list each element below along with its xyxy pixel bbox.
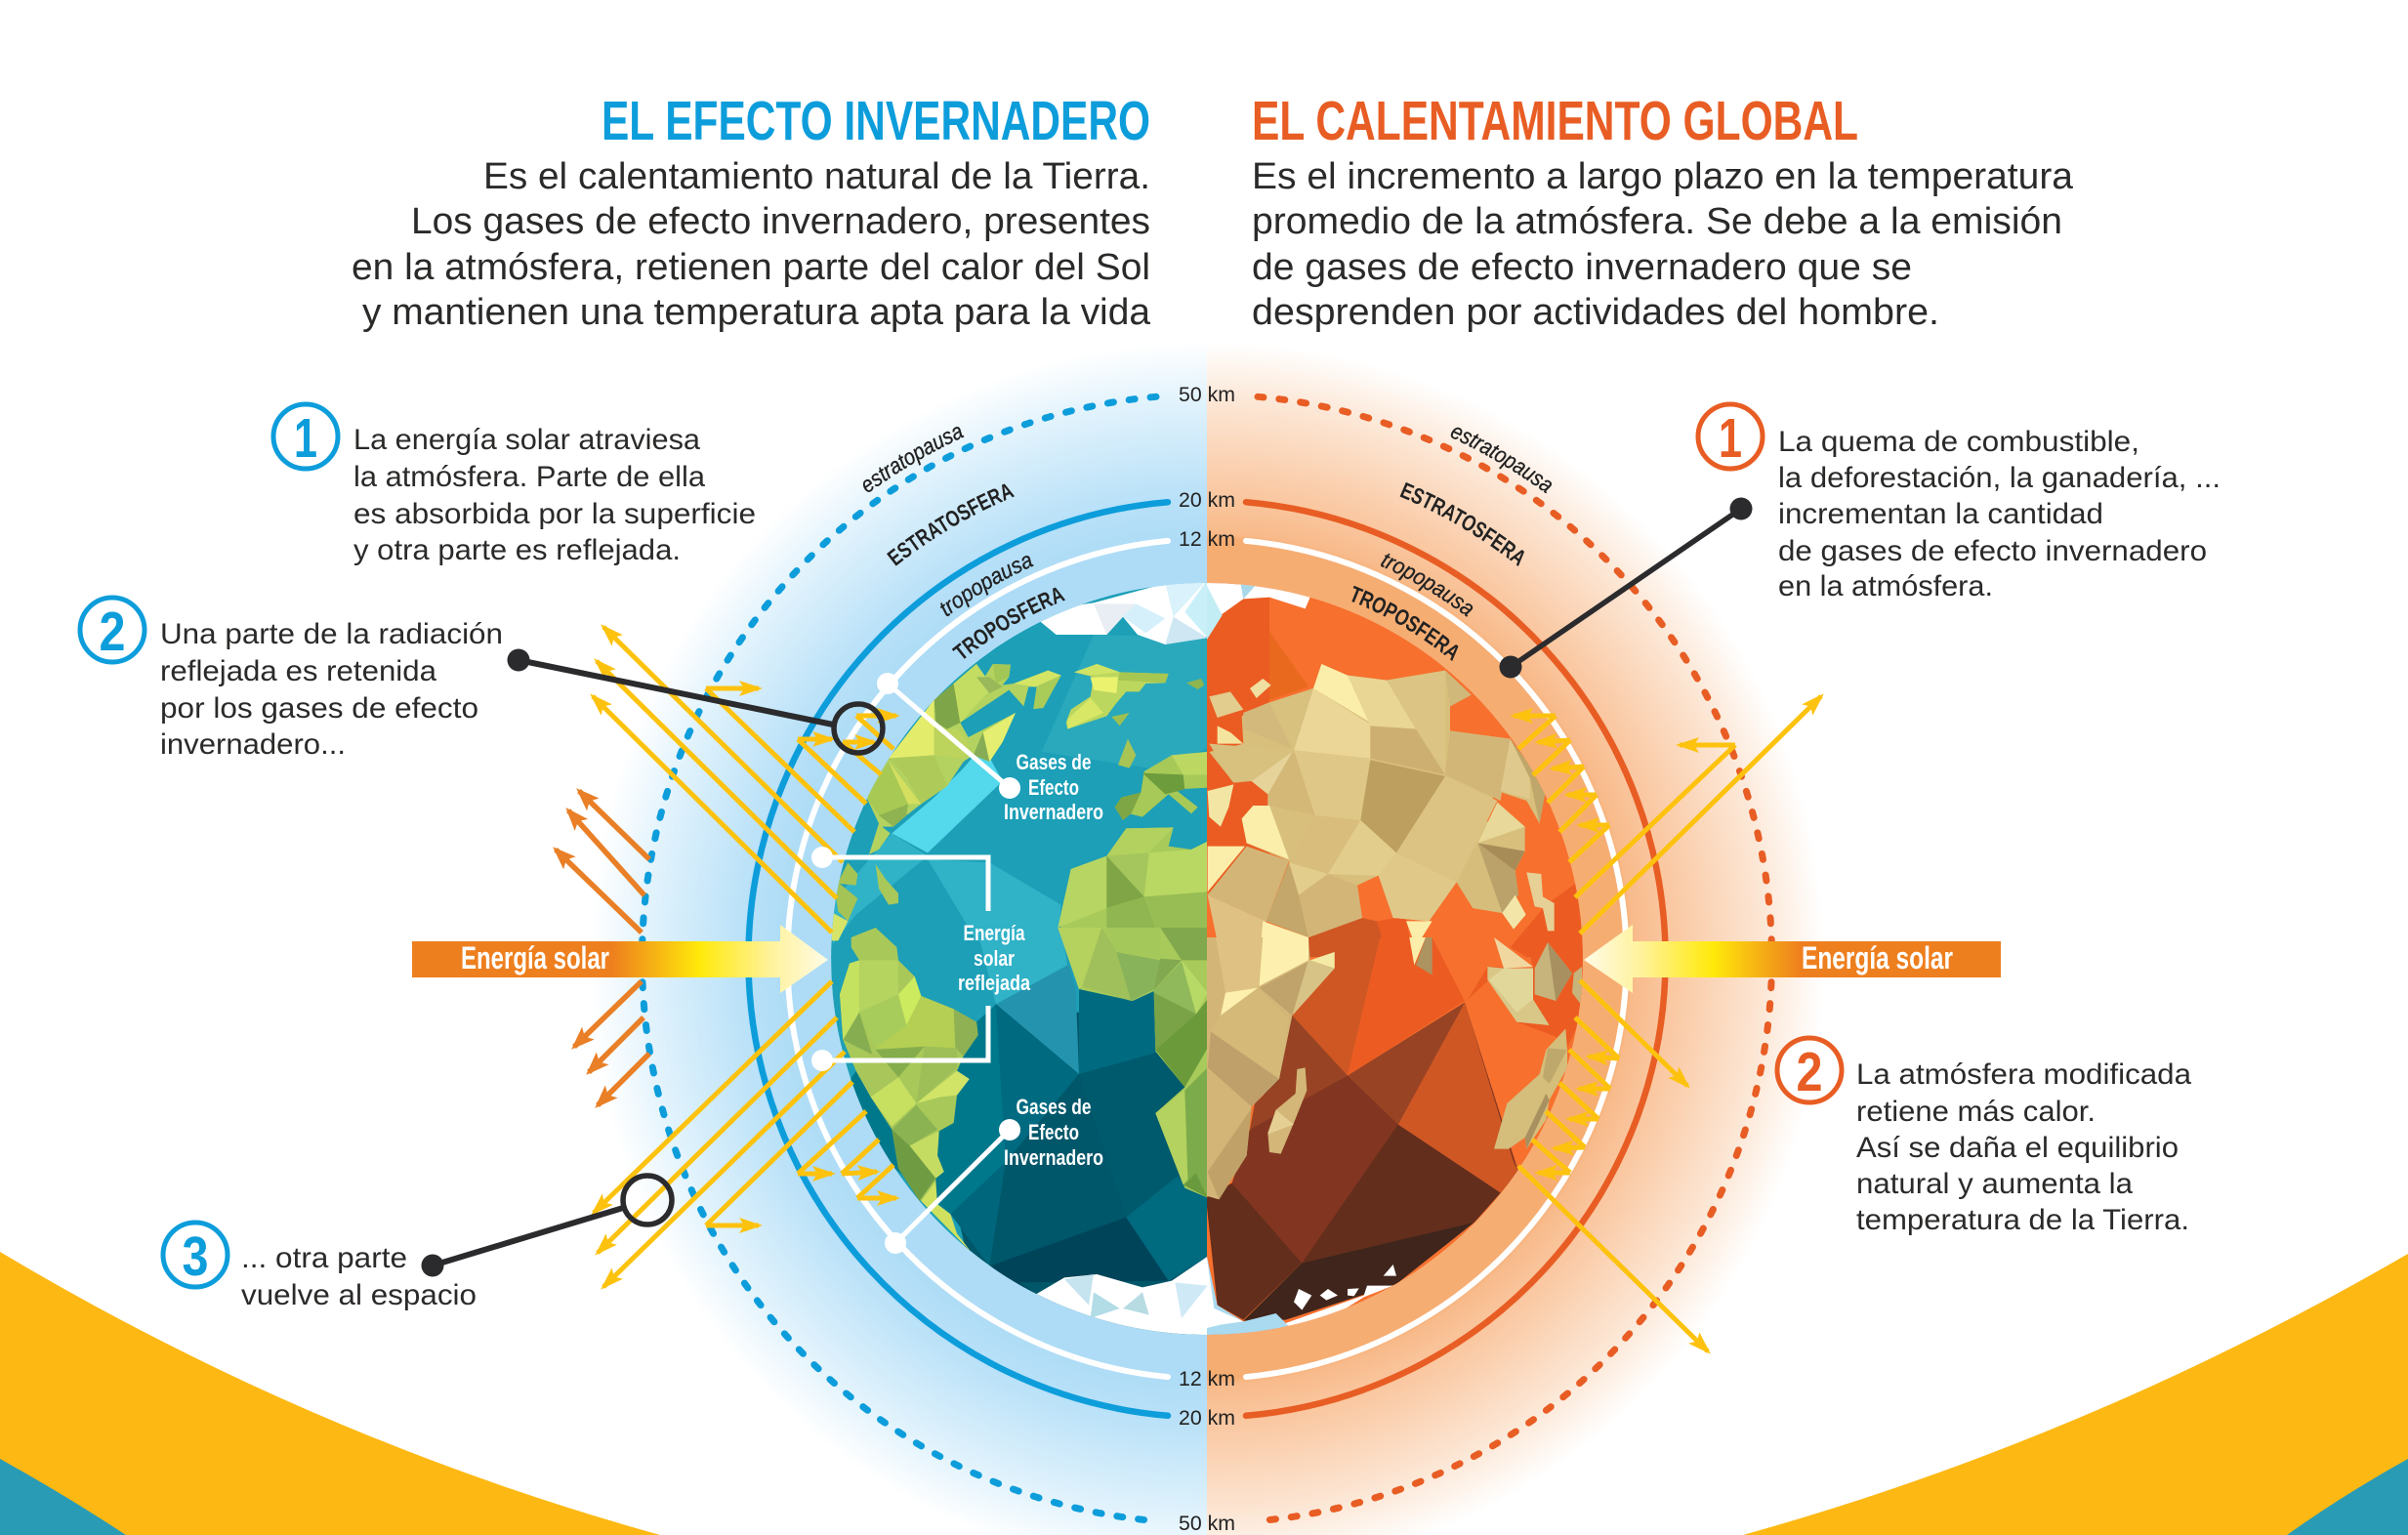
intro text: global warming: desprenden por actividades del hombre. (1252, 292, 1939, 333)
earth label: gases upper: Invernadero (1004, 800, 1103, 824)
arabia and africa east (1201, 937, 1335, 1199)
atmosphere rings: right (1246, 396, 1771, 1521)
earth: left half, natural blue and green (820, 576, 1211, 1350)
leader line: callout 2 left to lens (508, 648, 883, 753)
earth label: gases upper: Efecto (1028, 775, 1079, 800)
curved atmosphere labels: right: estratopausa (1451, 428, 1552, 494)
callout: right 1: incrementan la cantidad (1778, 498, 2103, 530)
intro text: greenhouse effect: Es el calentamiento natural de la Tierra. (483, 156, 1150, 197)
earth label: gases lower: Invernadero (1004, 1145, 1103, 1170)
callout: right 2: natural y aumenta la (1856, 1168, 2133, 1200)
earth label: gases lower (1004, 1095, 1103, 1170)
antarctic ice (1207, 1256, 1288, 1335)
intro text: greenhouse effect: en la atmósfera, retienen parte del calor del Sol (352, 247, 1150, 288)
badge: right 2: 2 (1797, 1041, 1822, 1103)
badge: right 2 (1777, 1038, 1842, 1103)
upper ocean and eurasia (1201, 576, 1583, 957)
intro text: global warming: de gases de efecto invernadero que se (1252, 247, 1912, 288)
lower ocean and southern land (830, 928, 1208, 1350)
callout: left 2 (160, 618, 503, 761)
earth label: reflected energy: Energía (963, 921, 1025, 945)
reflected rays: left side (593, 627, 896, 1287)
callout: left 2: por los gases de efecto (160, 692, 478, 725)
title: global warming: EL CALENTAMIENTO GLOBAL (1252, 90, 1858, 152)
badge: left 2 (80, 598, 145, 663)
earth label: gases lower: Gases de (1016, 1095, 1092, 1119)
intro text: global warming: Es el incremento a largo plazo en la temperatura (1252, 156, 2074, 197)
white connector: reflected energy (811, 847, 988, 1071)
darker seas and islands (1511, 879, 1583, 957)
south america (840, 928, 978, 1252)
leader line: callout 3 left to lens (422, 1176, 672, 1277)
intro text: greenhouse effect (352, 156, 1151, 333)
south-east asia (1494, 937, 1533, 969)
upper ocean and northern land (830, 579, 1208, 944)
callout: left 1: La energía solar atraviesa (353, 424, 700, 456)
curved atmosphere labels: left: ESTRATOSFERA (887, 484, 1015, 566)
central america (876, 864, 898, 905)
callout: right 2: temperatura de la Tierra. (1856, 1204, 2189, 1236)
india tip and madagascar (1409, 937, 1426, 965)
leader line: callout 1 right (1500, 498, 1752, 678)
callout: left 3: vuelve al espacio (241, 1279, 477, 1311)
earth label: reflected energy: solar (974, 946, 1015, 971)
atmosphere glow: orange half (1207, 353, 1812, 1535)
callout: right 2 (1856, 1058, 2191, 1236)
callout: right 1 (1778, 426, 2221, 602)
solar energy arrow: left: Energía solar (461, 940, 609, 975)
bottom decorative band: left (0, 1252, 660, 1535)
curved atmosphere labels: right: ESTRATOSFERA (1400, 482, 1524, 566)
australia (1494, 1028, 1567, 1149)
callout: right 1: en la atmósfera. (1778, 570, 1993, 602)
altitude labels: 12 km (1179, 528, 1235, 551)
atmosphere glow: blue half (606, 358, 1207, 1535)
solar energy arrow: left (412, 925, 828, 993)
greenland and arctic islands (1066, 664, 1169, 729)
eurasia (1209, 664, 1546, 937)
callout: left 2: reflejada es retenida (160, 655, 436, 687)
badge: right 1: 1 (1719, 407, 1742, 470)
curved atmosphere labels: right (1351, 428, 1552, 661)
arctic ice (1207, 583, 1310, 615)
callout: left 1: la atmósfera. Parte de ella (353, 461, 705, 493)
earth label: reflected energy: reflejada (958, 971, 1031, 995)
callout: right 2: La atmósfera modificada (1856, 1058, 2191, 1091)
title: greenhouse effect: EL EFECTO INVERNADERO (602, 90, 1150, 152)
curved atmosphere labels: left: tropopausa (939, 556, 1034, 617)
white connector: gases upper (877, 673, 1020, 799)
earth label: reflected energy (958, 921, 1031, 995)
callout: left 1 (353, 424, 756, 566)
callout: left 2: invernadero... (160, 728, 346, 761)
solar energy arrow: right (1584, 925, 2001, 993)
callout: right 2: retiene más calor. (1856, 1096, 2096, 1128)
altitude labels: 20 km (1179, 1407, 1235, 1430)
badge: left 2: 2 (100, 601, 125, 663)
africa north-west (1060, 827, 1207, 928)
white connector: gases lower (885, 1119, 1020, 1254)
africa south-west (1058, 928, 1208, 1198)
europe west (1115, 752, 1208, 820)
altitude labels (1179, 384, 1235, 1535)
altitude labels: 12 km (1179, 1368, 1235, 1390)
bottom decorative band: right (1743, 1254, 2408, 1535)
callout: left 3 (241, 1242, 477, 1311)
callout: left 1: es absorbida por la superficie (353, 498, 756, 530)
earth label: gases upper (1004, 750, 1103, 824)
badge: left 1: 1 (294, 407, 317, 470)
curved atmosphere labels: right: tropopausa (1381, 553, 1473, 617)
callout: left 1: y otra parte es reflejada. (353, 534, 681, 566)
europe (1209, 691, 1243, 718)
intro text: greenhouse effect: y mantienen una temperatura apta para la vida (362, 292, 1151, 333)
callout: right 1: de gases de efecto invernadero (1778, 535, 2207, 567)
callout: right 2: Así se daña el equilibrio (1856, 1132, 2179, 1164)
antarctic ice (1037, 1257, 1207, 1335)
earth label: gases lower: Efecto (1028, 1120, 1079, 1144)
badge: left 3 (163, 1223, 228, 1288)
earth: right half, heated orange and sand (1201, 576, 1592, 1348)
atmosphere rings: left (643, 396, 1168, 1521)
north america (866, 664, 1061, 854)
curved atmosphere labels: left (863, 427, 1065, 659)
intro text: global warming (1252, 156, 2074, 333)
arctic ice (1041, 583, 1207, 644)
altitude labels: 50 km (1179, 384, 1235, 406)
intro text: global warming: promedio de la atmósfera. Se debe a la emisión (1252, 201, 2062, 242)
earth label: gases upper: Gases de (1016, 750, 1092, 774)
intro text: greenhouse effect: Los gases de efecto invernadero, presentes (411, 201, 1150, 242)
callout: left 2: Una parte de la radiación (160, 618, 503, 650)
callout: right 1: La quema de combustible, (1778, 426, 2139, 458)
curved atmosphere labels: left: TROPOSFERA (951, 588, 1065, 659)
africa north-east (1208, 847, 1245, 892)
curved atmosphere labels: right: TROPOSFERA (1351, 586, 1459, 661)
solar energy arrow: right: Energía solar (1802, 940, 1953, 975)
lower ocean and southern land (1201, 937, 1584, 1348)
callout: right 1: la deforestación, la ganadería, ... (1778, 462, 2221, 494)
badge: right 1 (1698, 404, 1763, 470)
callout: left 3: ... otra parte (241, 1242, 407, 1274)
badge: left 1 (273, 404, 338, 470)
badge: left 3: 3 (182, 1225, 209, 1288)
altitude labels: 50 km (1179, 1513, 1235, 1535)
reflected rays: left side, orange (556, 791, 649, 1105)
curved atmosphere labels: left: estratopausa (863, 427, 965, 492)
reflected rays: right side (1514, 696, 1821, 1351)
altitude labels: 20 km (1179, 489, 1235, 512)
